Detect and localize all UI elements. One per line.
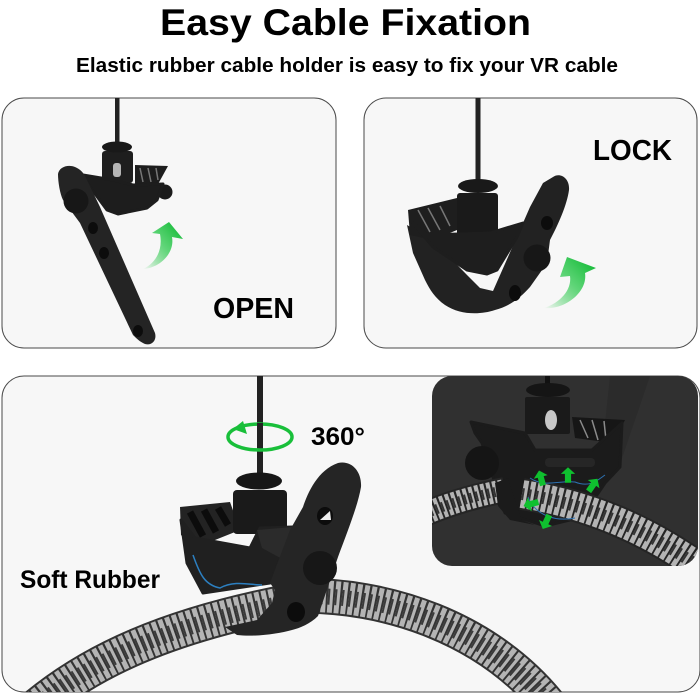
knob <box>465 446 492 480</box>
label: lock: LOCK <box>593 135 672 167</box>
holder body <box>83 142 172 214</box>
arrow: lock <box>544 257 596 308</box>
strap front <box>495 478 535 525</box>
cable <box>115 98 120 148</box>
title: Easy Cable Fixation <box>160 2 531 43</box>
knob <box>64 188 88 214</box>
label: 360: 360° <box>311 423 365 451</box>
arrow: open <box>143 222 183 269</box>
label: soft rubber: Soft Rubber <box>20 566 160 594</box>
holder body <box>408 179 523 274</box>
holder top <box>525 383 625 443</box>
rubber strap <box>225 463 361 636</box>
inset cable, left part <box>425 490 505 514</box>
cable, thin <box>257 376 263 480</box>
pressure arrows <box>524 467 600 529</box>
cable <box>476 98 480 186</box>
panel: dark inset <box>425 376 700 575</box>
strap holes <box>88 222 143 337</box>
holder body <box>180 472 293 593</box>
label: open: OPEN <box>213 293 294 325</box>
subtitle: Elastic rubber cable holder is easy to fix your VR cable <box>76 55 618 77</box>
inset cable, right part <box>522 494 700 575</box>
cable, braided right part <box>300 596 555 700</box>
holder body <box>471 422 622 526</box>
strap holes <box>287 507 333 622</box>
inset cable, top <box>545 376 550 383</box>
knob <box>303 551 337 585</box>
blue contour <box>528 475 605 519</box>
knob <box>524 244 550 272</box>
panel: soft rubber <box>2 376 700 700</box>
rubber strap, closed <box>407 175 569 313</box>
panel: open <box>2 98 336 348</box>
cable, braided left part <box>30 602 290 700</box>
panel: lock <box>364 98 697 348</box>
strap holes <box>509 216 553 301</box>
rotation icon, 360 <box>228 421 292 450</box>
strap shadow <box>600 376 650 470</box>
body slot <box>545 458 595 467</box>
rubber strap, open <box>58 166 155 344</box>
